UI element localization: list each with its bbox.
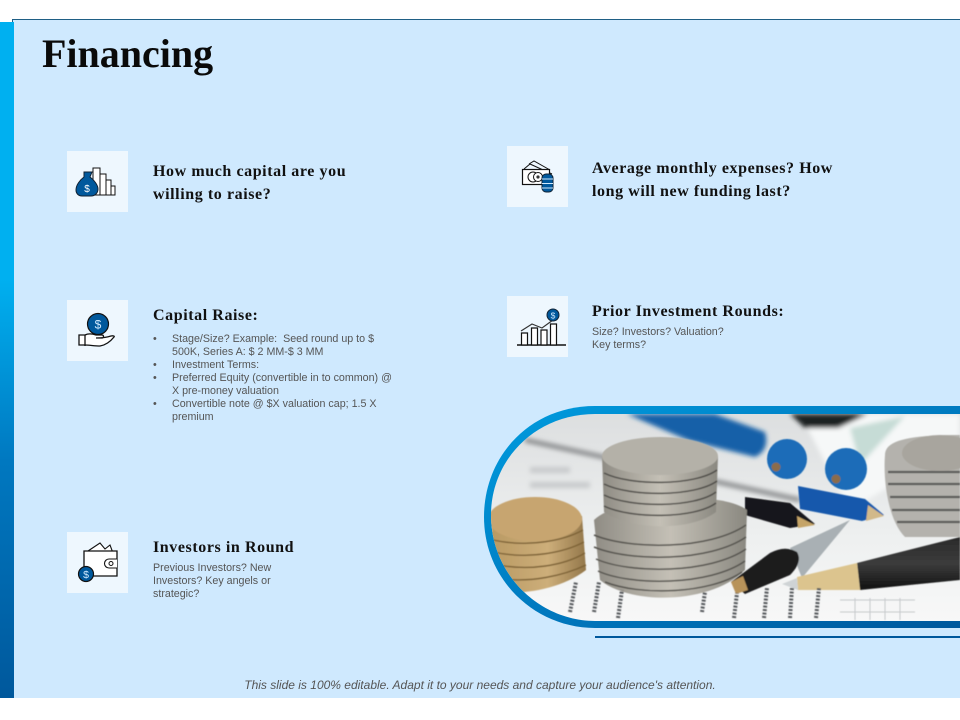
bullet list xyxy=(153,333,392,423)
block: prior investment rounds xyxy=(592,303,784,351)
blue pen caps xyxy=(767,439,807,479)
icon: hand holding coin: $ xyxy=(95,318,102,332)
gold coin stack xyxy=(491,516,586,593)
icon: money bag with bars: $ xyxy=(84,184,90,195)
bullet list: • xyxy=(153,333,157,345)
bullet list: X pre-money valuation xyxy=(172,385,279,397)
text: prior rounds questions xyxy=(592,326,724,351)
heading: monthly expenses xyxy=(592,160,833,200)
bullet list: Stage/Size? Example: Seed round up to $ xyxy=(172,333,374,345)
lower silver stack xyxy=(594,498,747,598)
black pen nib xyxy=(745,497,815,528)
text: investors questions: Investors? Key angels or xyxy=(153,575,271,587)
icon: wallet with coin: $ xyxy=(83,569,89,581)
icon: money bag with bars xyxy=(67,151,128,212)
icon: hand holding coin xyxy=(67,300,128,361)
bullet list: Convertible note @ $X valuation cap; 1.5 X xyxy=(172,398,377,410)
icon: growth chart: $ xyxy=(551,310,556,320)
left accent bar xyxy=(0,22,14,698)
block: investors in round xyxy=(153,539,294,600)
text: investors questions xyxy=(153,562,272,600)
text: investors questions: Previous Investors? New xyxy=(153,562,271,574)
title: Financing xyxy=(42,31,213,76)
bullet list: Investment Terms: xyxy=(172,359,259,371)
icon: cash and coins xyxy=(507,146,568,207)
upper silver stack xyxy=(602,456,718,526)
blue pen tip xyxy=(798,486,884,521)
footer note: This slide is 100% editable. Adapt it to your needs and capture your audience's attention. xyxy=(244,678,716,692)
heading: capital to raise xyxy=(153,163,346,203)
heading: capital raise: Capital Raise: xyxy=(153,307,258,324)
photo: coins and pens in rounded frame xyxy=(484,406,960,638)
icon: growth chart xyxy=(507,296,568,357)
frame xyxy=(484,406,960,628)
icon: wallet with coin xyxy=(67,532,128,593)
bullet list: premium xyxy=(172,411,214,423)
heading: monthly expenses: Average monthly expenses? How xyxy=(592,160,833,177)
right coin stack xyxy=(885,435,960,537)
text: investors questions: strategic? xyxy=(153,588,199,600)
heading: prior rounds: Prior Investment Rounds: xyxy=(592,303,784,320)
bullet list: • xyxy=(153,359,157,371)
bullet list: • xyxy=(153,398,157,410)
text: prior rounds questions: Key terms? xyxy=(592,339,646,351)
heading: monthly expenses: long will new funding last? xyxy=(592,183,791,200)
heading: capital to raise: willing to raise? xyxy=(153,186,271,203)
bullet list: 500K, Series A: $ 2 MM-$ 3 MM xyxy=(172,346,323,358)
bullet list: Preferred Equity (convertible in to common) @ xyxy=(172,372,392,384)
heading: investors in round: Investors in Round xyxy=(153,539,294,556)
printed paper strips xyxy=(570,582,819,618)
heading: capital to raise: How much capital are you xyxy=(153,163,346,180)
bullet list: • xyxy=(153,372,157,384)
block: capital raise xyxy=(153,307,392,423)
text: prior rounds questions: Size? Investors? Valuation? xyxy=(592,326,724,338)
black marker xyxy=(790,520,850,578)
black and gold pen xyxy=(857,537,960,590)
accent line under photo xyxy=(595,636,960,638)
